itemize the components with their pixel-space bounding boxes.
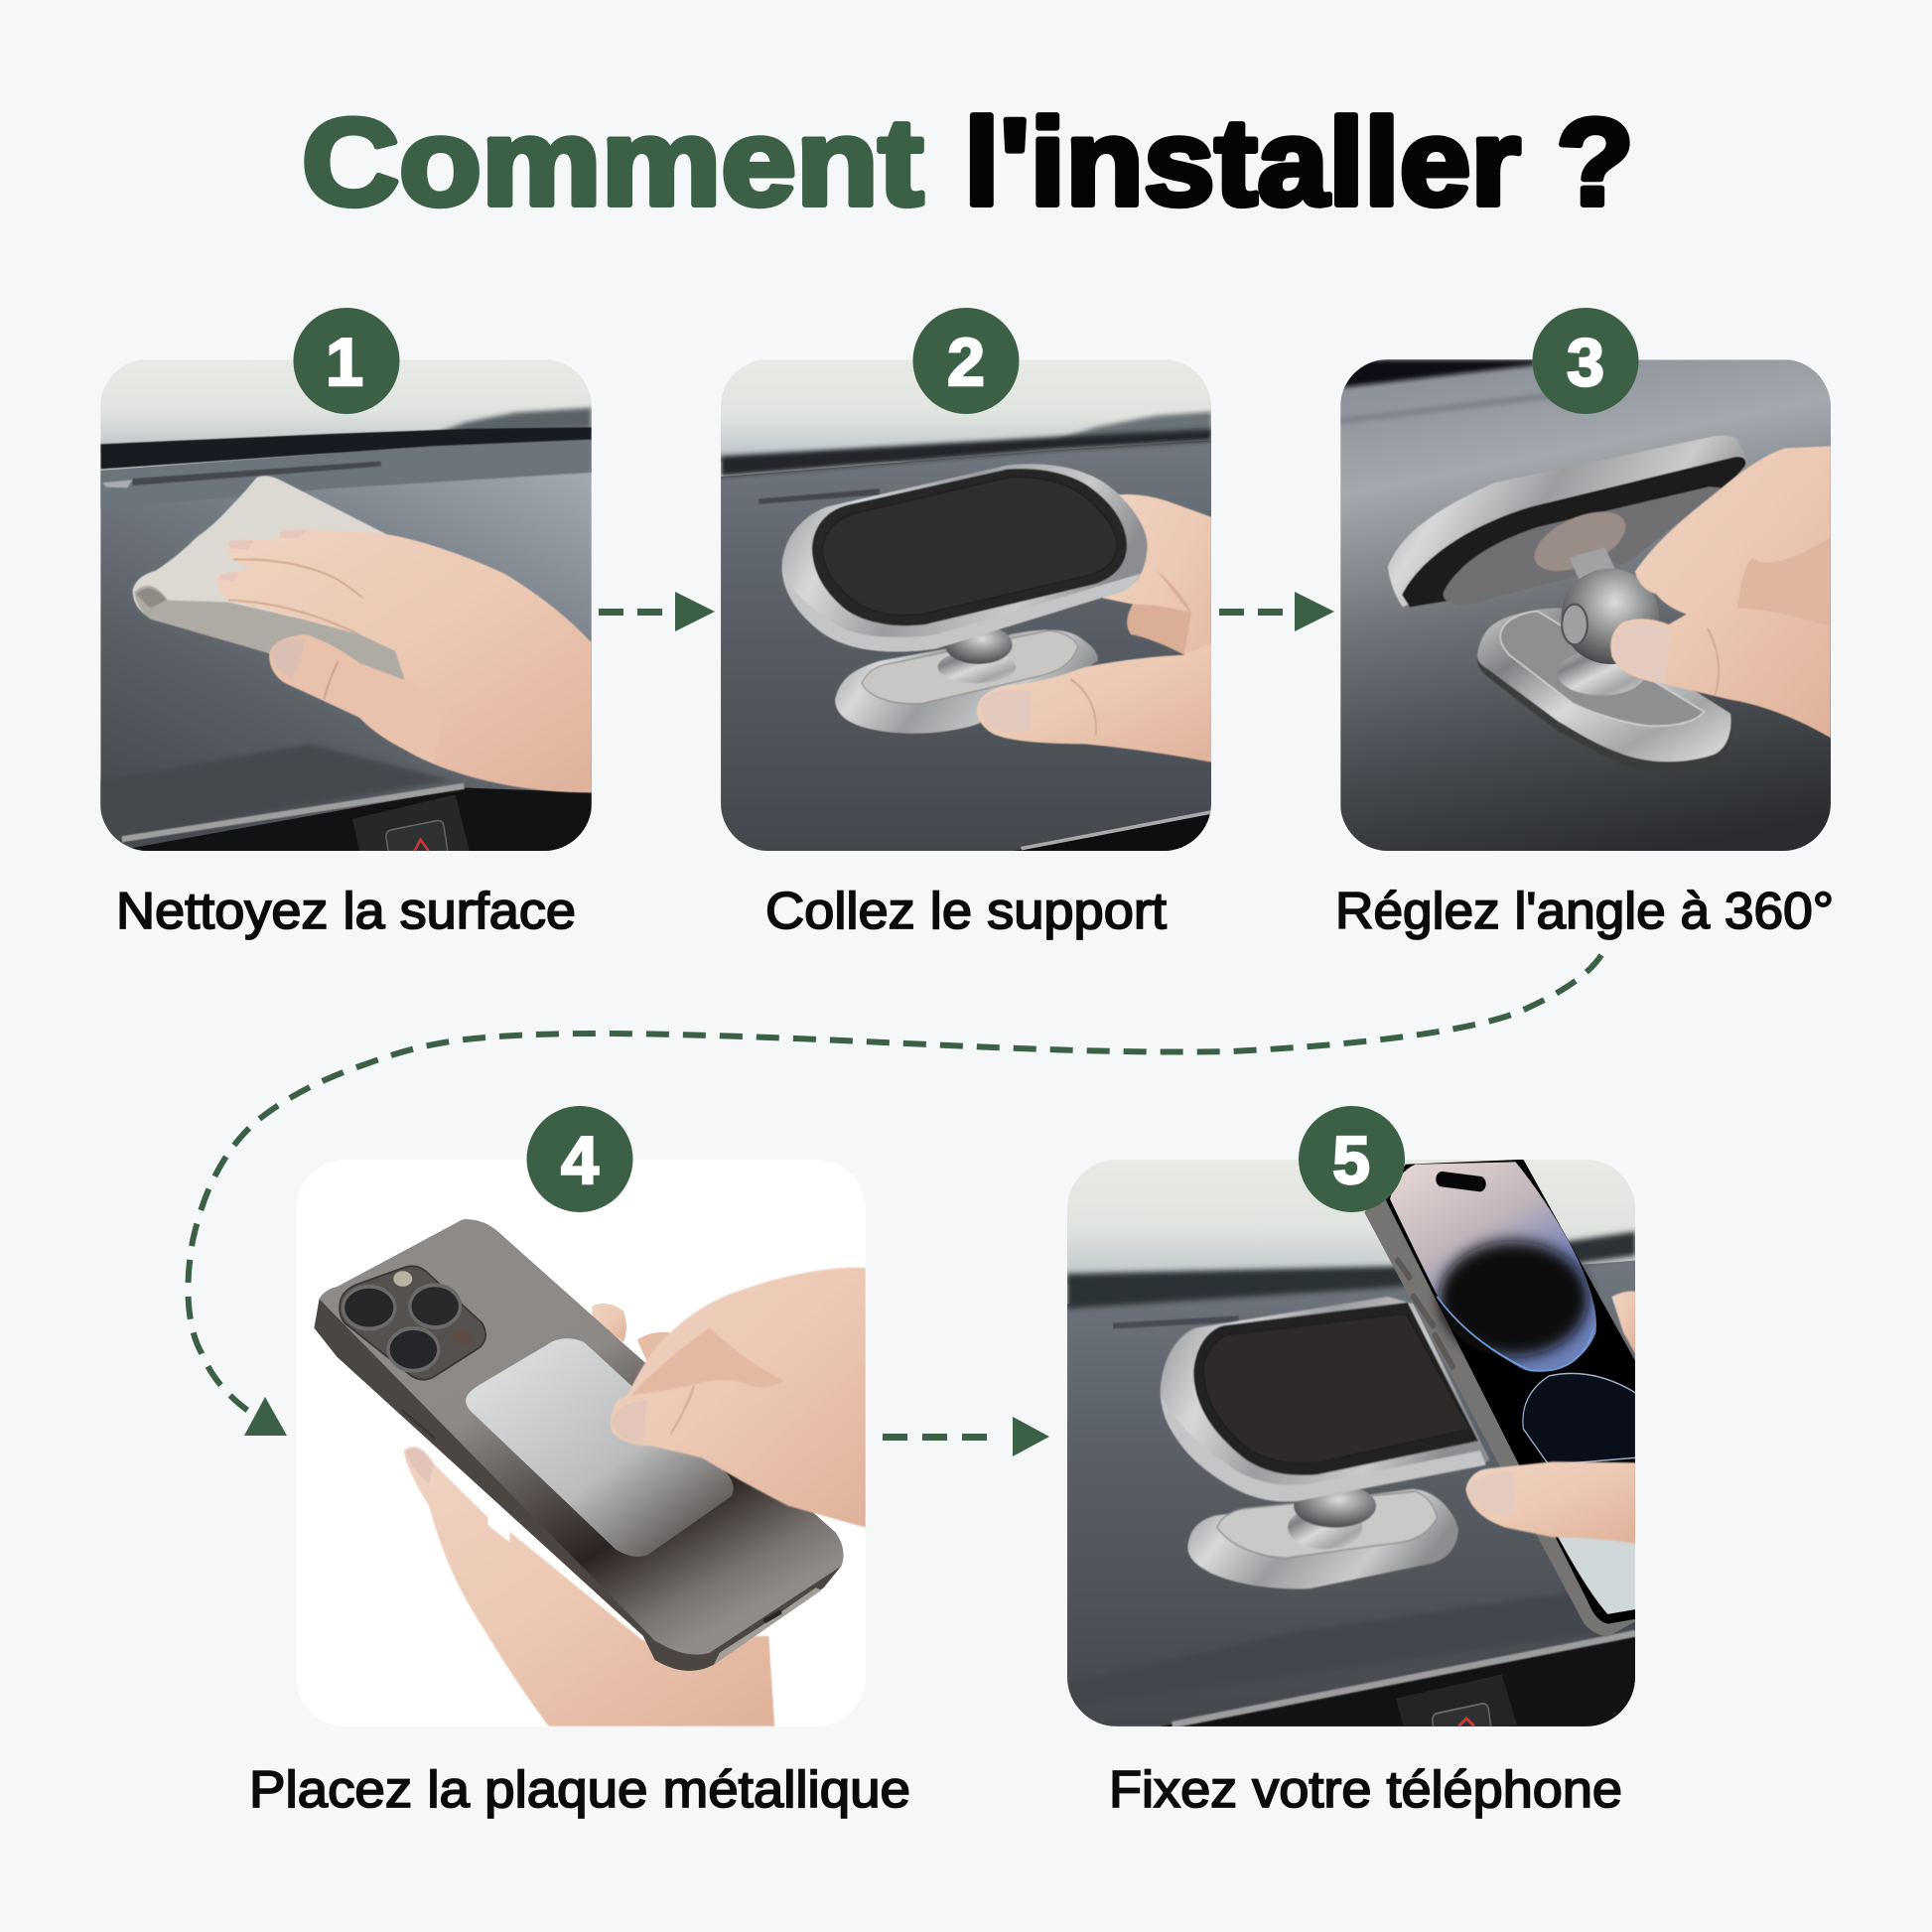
badge: step 3: 3 [1567,325,1604,400]
holding hand [404,1447,774,1726]
panel: step 4 photo, placing the metal plate [296,1160,869,1727]
phone [1364,1160,1635,1637]
arrow: step 1 to step 2 [599,592,715,631]
arrow: step 2 to step 3 [1219,592,1334,631]
label: step 3: Réglez l'angle à 360° [1335,883,1834,940]
mount base [835,625,1098,734]
arrow: step 3 curving to step 4 [188,955,1601,1436]
hand holding the phone, rear fingers [592,1304,670,1361]
label: step 2: Collez le support [765,883,1168,940]
badge: step 4 [526,1106,633,1212]
hand wiping [217,529,592,792]
fingers holding phone [1465,1292,1635,1544]
mount base [1477,608,1732,771]
hand behind mount [1103,494,1211,762]
label: step 5: Fixez votre téléphone [1109,1761,1622,1819]
phone back [314,1219,843,1671]
metal plate [466,1338,734,1557]
badge: step 1 [294,308,399,414]
label: step 1: Nettoyez la surface [116,883,576,940]
panel: step 3 photo, adjusting the angle [1340,359,1832,851]
badge: step 2: 2 [947,325,985,400]
pressing hand [611,1268,866,1528]
panel: step 1 photo, cleaning the dashboard [100,359,592,867]
thumb pressing base [977,642,1211,762]
camera module [340,1266,485,1380]
badge: step 3 [1533,308,1638,414]
arrow: step 4 to step 5 [883,1417,1049,1456]
mount base [1187,1484,1458,1588]
panel: step 2 photo, sticking the mount [721,359,1211,851]
title [302,94,1634,231]
badge: step 4: 4 [561,1123,599,1198]
badge: step 2 [913,308,1019,414]
title: l'installer ? [964,94,1634,231]
cloth [132,475,385,653]
magnetic plate [781,464,1148,651]
label: step 4: Placez la plaque métallique [249,1761,910,1819]
badge: step 5: 5 [1332,1123,1370,1198]
magnetic plate [1161,1297,1490,1502]
badge: step 5 [1299,1106,1405,1212]
fingers on ball [1610,446,1831,738]
title: Comment [302,94,923,231]
tilted magnetic plate [1388,436,1749,607]
panel: step 5 photo, attaching the phone [1067,1160,1636,1747]
badge: step 1: 1 [326,325,363,400]
ball joint [1561,569,1659,664]
